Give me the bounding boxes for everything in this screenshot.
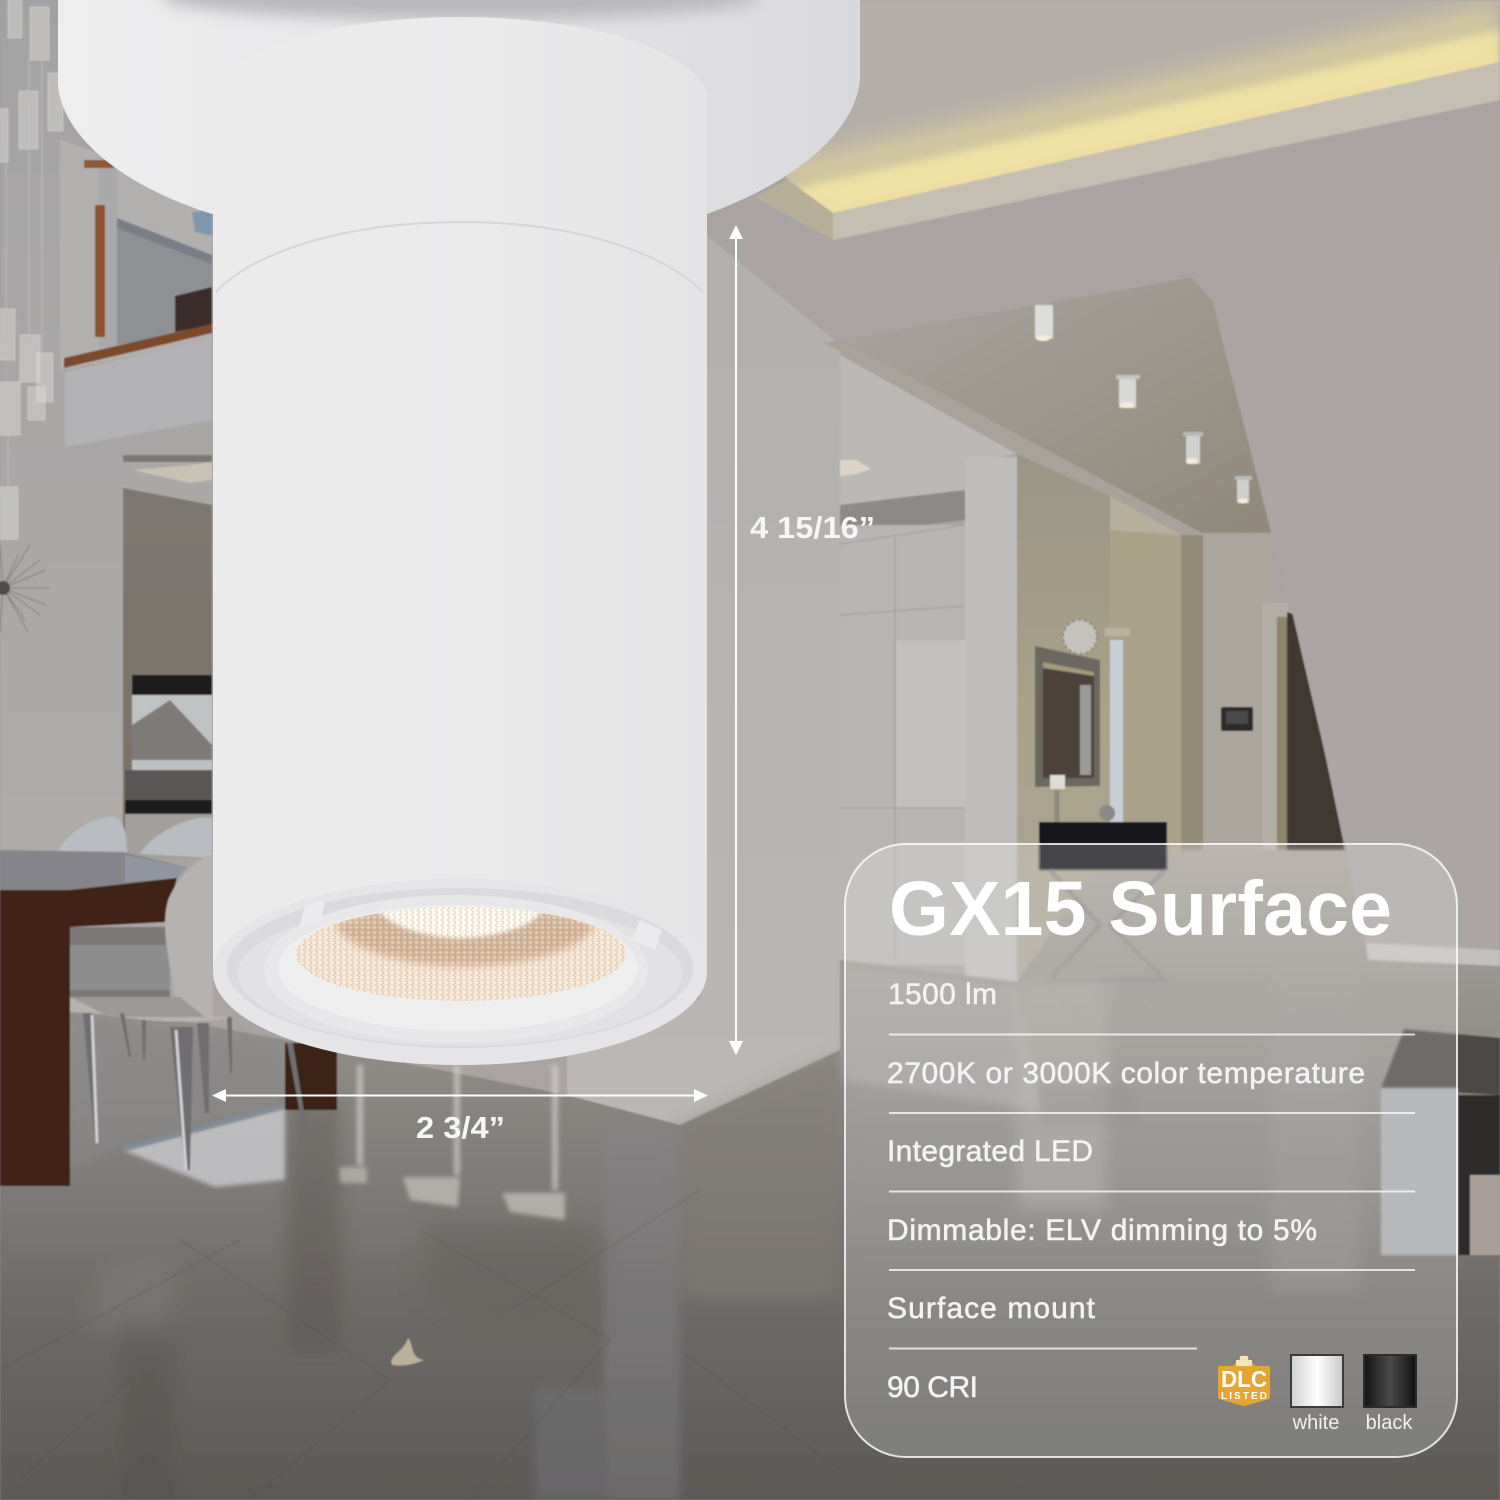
spec: lumens: 1500 lm	[888, 978, 997, 1011]
back room cabinets	[840, 352, 1017, 965]
fixture inner disc	[278, 905, 638, 1031]
floor reflections	[70, 960, 1360, 1500]
icon: DLC listed badge: LISTED	[1221, 1391, 1267, 1402]
swatch: white finish: white	[1292, 1412, 1339, 1434]
lower room	[123, 455, 212, 859]
swatch: black finish: black	[1366, 1412, 1413, 1434]
fixture front lip	[213, 879, 707, 1065]
thermostat	[1221, 707, 1253, 731]
ceiling spot lights	[1035, 305, 1252, 504]
spec: dimming: Dimmable: ELV dimming to 5%	[887, 1214, 1317, 1247]
hallway walls	[840, 339, 1345, 982]
hanging crystal chandelier	[0, 0, 63, 539]
cylinder seam	[216, 222, 703, 292]
fixture cup tabs	[300, 900, 662, 950]
right side block	[1381, 1029, 1500, 1255]
spec: mount: Surface mount	[887, 1292, 1096, 1325]
height dimension arrow	[729, 225, 743, 1055]
width dimension arrow	[212, 1089, 708, 1102]
fixture inner cup	[264, 895, 648, 1043]
icon: DLC listed badge	[1219, 1356, 1269, 1405]
wall mirror	[1035, 620, 1115, 822]
sunburst wall clock	[0, 545, 50, 632]
icon: DLC listed badge: DLC	[1221, 1366, 1267, 1392]
height dimension label: 4 15/16”	[750, 510, 875, 545]
swatch: white finish	[1291, 1355, 1343, 1434]
balcony	[64, 324, 212, 462]
console table	[1039, 822, 1167, 1050]
fixture: white surface-mount cylinder	[58, 0, 875, 1145]
hallway ceiling	[824, 277, 1272, 536]
fixture lower ring highlight	[238, 902, 682, 1046]
spec: CRI: 90 CRI	[887, 1371, 978, 1404]
spec: color temperature: 2700K or 3000K color temperature	[887, 1057, 1365, 1090]
swatch: black finish	[1364, 1355, 1416, 1434]
left wall	[0, 0, 123, 856]
panel: product specifications	[844, 843, 1458, 1458]
big diagonal wall	[1213, 257, 1500, 958]
ceiling flange	[58, 0, 860, 214]
title: GX15 Surface	[889, 866, 1392, 952]
floor tile seams	[0, 1190, 840, 1500]
fixture inner cavity	[227, 888, 693, 1048]
width dimension label: 2 3/4”	[416, 1110, 505, 1145]
cylinder body	[213, 17, 707, 1065]
upper room behind balcony	[60, 140, 212, 370]
ceiling with cove lighting	[700, 0, 1500, 240]
spec: integrated LED: Integrated LED	[887, 1135, 1093, 1168]
flange top shading	[160, 0, 760, 20]
baseboard	[1366, 943, 1500, 966]
floor	[0, 850, 1500, 1500]
dining table and chairs	[0, 817, 337, 1186]
main wall column	[567, 230, 840, 1125]
chrome chair legs	[83, 1013, 307, 1170]
fixture lens honeycomb	[296, 907, 626, 1001]
